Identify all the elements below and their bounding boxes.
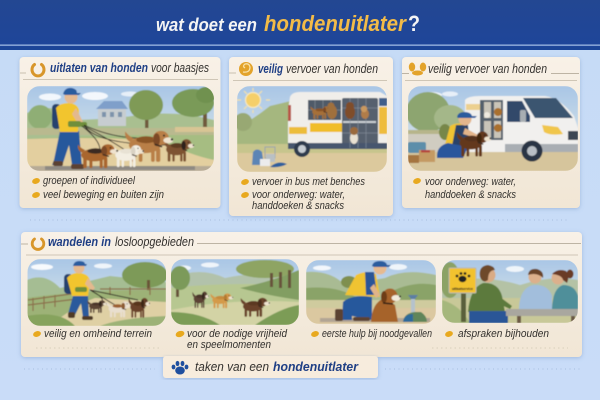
heading — [48, 235, 194, 249]
dogs — [192, 292, 270, 317]
icon: supply boxes — [408, 142, 435, 163]
heading: veilig vervoer van honden — [428, 62, 547, 76]
panel: veilig vervoer met benches — [229, 57, 393, 216]
bullet list: voor onderweg: water, — [425, 176, 516, 188]
bullet list — [240, 176, 365, 212]
icon: water bowl and bag — [403, 295, 427, 322]
icon: sun — [237, 88, 270, 113]
panel: veilig vervoer met uitlater — [402, 57, 580, 208]
figure: walker — [64, 261, 95, 320]
caption: eerste hulp bij noodgevallen — [322, 328, 432, 340]
caption: afspraken bijhouden — [458, 328, 549, 340]
figure: woman — [552, 270, 578, 312]
figure: person seen from behind — [468, 265, 512, 323]
heading: wandelen in — [48, 235, 111, 249]
dogs — [78, 131, 194, 168]
caption — [175, 328, 288, 351]
heading — [258, 62, 378, 76]
icon: spiral medallion — [239, 62, 253, 76]
footer text — [195, 359, 359, 374]
heading: voor baasjes — [151, 61, 209, 75]
illustration: walker with dogs on fenced path — [27, 259, 168, 326]
scene: veilig en omheind terrein — [27, 259, 168, 340]
figure: seated dog — [371, 288, 401, 322]
icon: paw — [172, 361, 188, 374]
illustration: dog walker with four dogs — [27, 86, 216, 171]
figure: kneeling walker — [335, 261, 391, 321]
bullet list: handdoeken & snacks — [252, 200, 344, 212]
footer tag — [163, 356, 378, 378]
figure: kneeling walker — [437, 112, 478, 158]
title — [156, 11, 420, 36]
footer text: hondenuitlater — [273, 359, 359, 374]
bullet list — [412, 176, 516, 201]
scene: vrijheid en speelmomenten — [170, 259, 299, 351]
dogs — [87, 298, 150, 318]
icon: horseshoe — [32, 64, 44, 76]
heading: uitlaten van honden — [50, 61, 148, 75]
bullet list: voor onderweg: water, — [252, 189, 345, 201]
heading: vervoer van honden — [286, 62, 378, 76]
scene: eerste hulp — [306, 260, 436, 340]
icon: travel bags — [252, 147, 287, 167]
header banner — [0, 0, 600, 50]
van — [288, 92, 387, 157]
title: ? — [408, 11, 420, 36]
icon: horseshoe — [32, 239, 44, 249]
figure: man — [519, 269, 552, 312]
illustration: walker checks seated dog — [306, 260, 436, 324]
bullet list: vervoer in bus met benches — [252, 176, 365, 188]
scene: afspraken bijhouden — [440, 260, 578, 340]
dotted lines beside footer tag — [24, 368, 580, 370]
figure: walker — [52, 88, 87, 169]
bullet list: veel beweging en buiten zijn — [43, 189, 164, 201]
illustration: van with dog crates — [234, 86, 387, 172]
bullet list: handdoeken & snacks — [425, 189, 516, 201]
illustration: walker kneeling by van — [406, 86, 578, 171]
caption: voor de nodige vrijheid — [187, 328, 288, 340]
bullet list: groepen of individueel — [43, 175, 135, 187]
van — [465, 96, 578, 162]
bullet list — [31, 175, 164, 201]
table — [506, 309, 578, 323]
icon: paw sign: uitlaatservice — [452, 287, 473, 291]
heading: veilig — [258, 62, 283, 76]
title: wat doet een — [156, 15, 257, 35]
title: hondenuitlater — [264, 11, 407, 36]
caption: veilig en omheind terrein — [44, 328, 152, 340]
panel: wandelen in losloopgebieden — [21, 232, 582, 357]
illustration: dogs playing in meadow — [170, 259, 299, 325]
caption: en speelmomenten — [187, 339, 271, 351]
icon: paw medallion — [409, 62, 426, 76]
footer text: taken van een — [195, 359, 269, 374]
dotted separator — [30, 219, 570, 221]
house — [96, 101, 128, 126]
heading: losloopgebieden — [115, 235, 194, 249]
panel: uitlaten van honden — [20, 57, 220, 208]
